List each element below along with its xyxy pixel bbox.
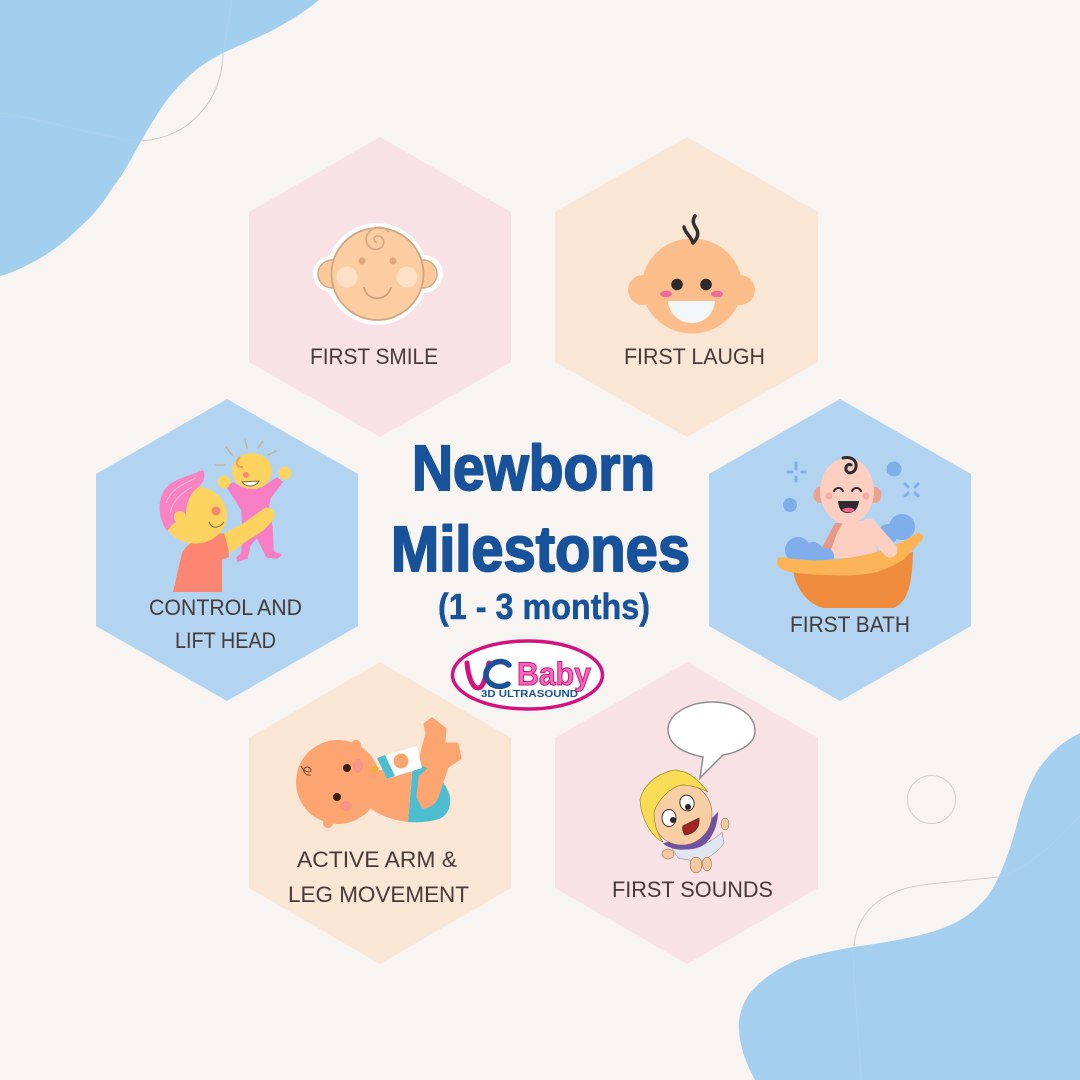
panel: first laugh [555,137,818,437]
logo: UC Baby 3D Ultrasound: Baby [517,656,591,692]
label: first sounds: FIRST SOUNDS [612,877,773,902]
label: first smile: FIRST SMILE [310,344,438,369]
icon: parent lifting baby [160,440,292,592]
panel: first smile [249,137,511,437]
panel: control and lift head [96,399,358,701]
background blob: bottom right [739,733,1080,1080]
title: (1 - 3 months) [438,586,650,627]
panel: first sounds [555,662,818,964]
title: Newborn [412,432,655,504]
title [391,432,690,627]
background blob: top left [0,0,319,276]
label: first bath: FIRST BATH [790,612,910,637]
icon: laughing baby face [628,216,755,334]
logo: UC Baby 3D Ultrasound: 3D ULTRASOUND [481,688,578,700]
icon: speech bubble [668,702,755,778]
panel: active arm and leg movement [249,662,511,964]
label: active arm and leg movement: ACTIVE ARM & [297,847,457,872]
label: first laugh: FIRST LAUGH [624,344,765,369]
panel: active arm and leg movement: LEG MOVEMENT [288,882,469,907]
icon: baby in bath [777,457,923,608]
title: Milestones [391,513,690,585]
icon: baby with bottle [296,719,460,828]
label: control and lift head: CONTROL AND [149,595,302,620]
panel: control and lift head: LIFT HEAD [175,628,276,653]
icon: baby with yellow hair [640,770,729,873]
panel: first bath [709,399,971,701]
logo: UC Baby 3D Ultrasound [452,641,602,709]
icon: smiling baby face [313,223,443,325]
